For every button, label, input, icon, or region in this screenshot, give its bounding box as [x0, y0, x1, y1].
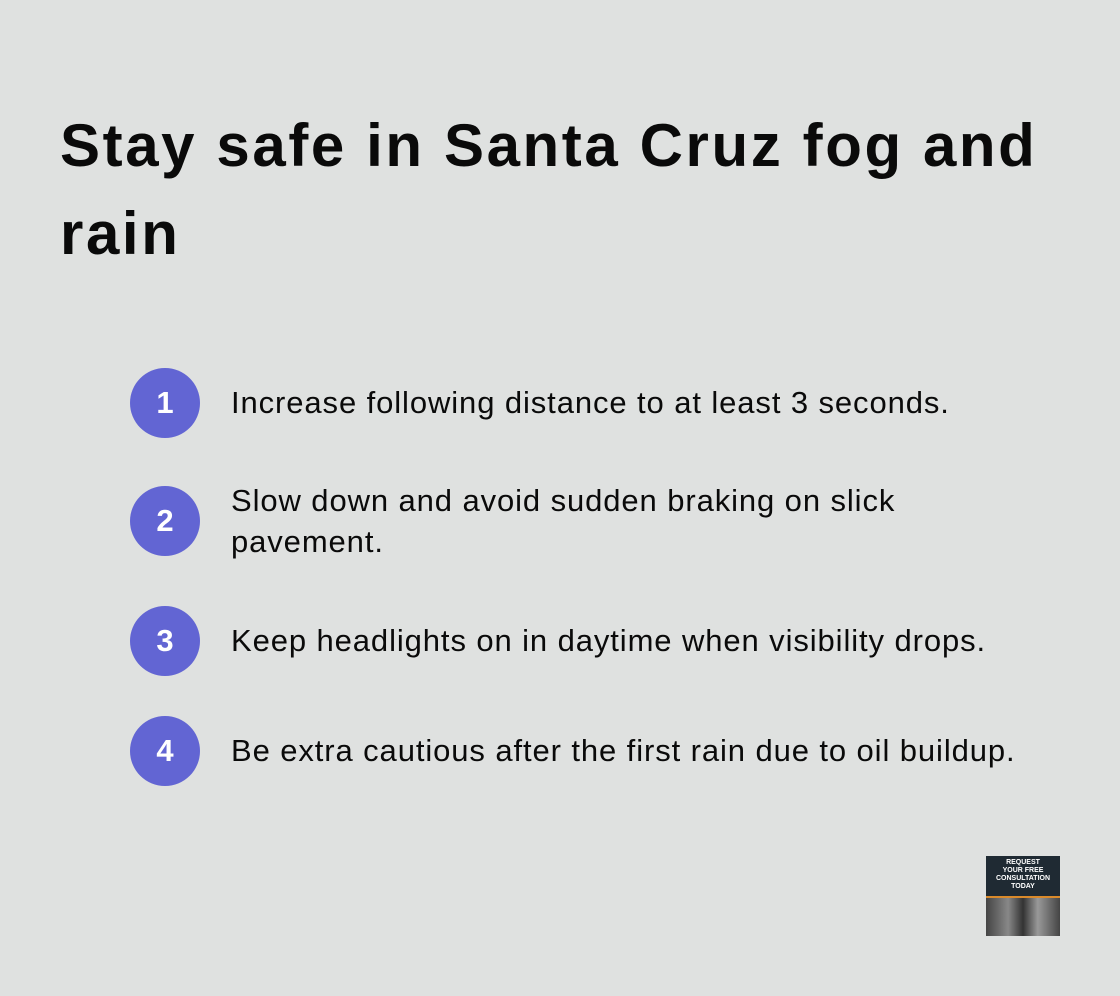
- number 3: [130, 606, 200, 676]
- consultation badge: [986, 856, 1060, 936]
- consultation badge: YOUR FREE: [1003, 867, 1043, 874]
- number 4: 4: [156, 733, 174, 768]
- number 3: 3: [156, 623, 174, 658]
- item 2: [130, 483, 895, 559]
- item 4: [130, 716, 1016, 786]
- number 4: [130, 716, 200, 786]
- number 2: 2: [156, 503, 174, 538]
- title: rain: [60, 200, 180, 267]
- text 4: Be extra cautious after the first rain due to oil buildup.: [231, 733, 1016, 768]
- item 1: [130, 368, 950, 438]
- text 2: Slow down and avoid sudden braking on slick pavement.: [231, 483, 895, 559]
- title: Stay safe in Santa Cruz fog and: [60, 112, 1037, 179]
- consultation badge: REQUEST: [1006, 859, 1040, 866]
- item 3: [130, 606, 986, 676]
- text 1: Increase following distance to at least 3 seconds.: [231, 385, 950, 420]
- number 1: [130, 368, 200, 438]
- number 2: [130, 486, 200, 556]
- number 1: 1: [156, 385, 174, 420]
- consultation badge: TODAY: [1011, 883, 1035, 890]
- text 3: Keep headlights on in daytime when visibility drops.: [231, 623, 986, 658]
- consultation badge: CONSULTATION: [996, 875, 1050, 882]
- title: [60, 112, 1037, 267]
